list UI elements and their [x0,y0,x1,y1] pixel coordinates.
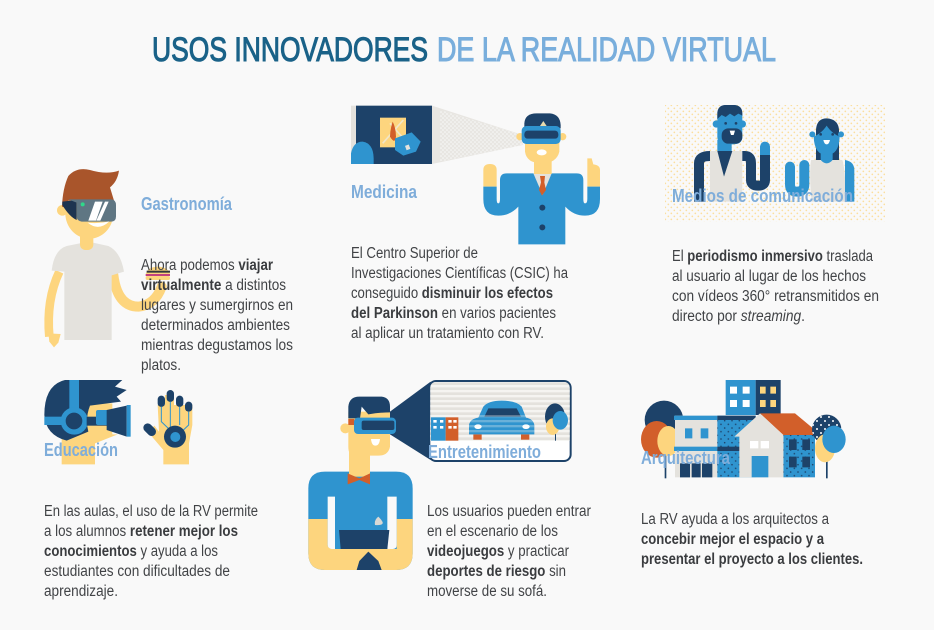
text block: medios de comunicación: El periodismo inmersivo traslada [672,248,873,265]
text block: arquitectura [641,511,863,568]
text block: gastronomía: determinados ambientes [141,317,290,334]
text block: medicina: al aplicar un tratamiento con RV. [351,325,544,342]
text block: medicina: Investigaciones Científicas (CSIC) ha [351,265,568,282]
text block: arquitectura: presentar el proyecto a los clientes. [641,551,863,568]
heading: medios de comunicación: Medios de comunicación [672,185,853,206]
text block: gastronomía: platos. [141,357,181,374]
illustration: man with VR headset eating [48,169,170,347]
panel: arquitectura [641,380,863,568]
text block: gastronomía: lugares y sumergirnos en [141,297,293,314]
text block: entretenimiento: deportes de riesgo sin [427,563,566,580]
text block: medios de comunicación: con vídeos 360° retransmitidos en [672,288,879,305]
title: USOS INNOVADORES [152,31,428,69]
text block: medicina: conseguido disminuir los efectos [351,285,553,302]
heading: gastronomía: Gastronomía [141,193,233,214]
text block: arquitectura: La RV ayuda a los arquitectos a [641,511,829,528]
text block: gastronomía: Ahora podemos viajar [141,257,273,274]
text block: educación: estudiantes con dificultades de [44,563,230,580]
panel: gastronomía [48,169,293,374]
panel: entretenimiento [308,381,591,600]
text block: gastronomía: virtualmente a distintos [141,277,286,294]
illustration: student head with VR binoculars and data glove [44,380,192,464]
heading: arquitectura: Arquitectura [641,447,731,468]
text block: medios de comunicación: al usuario al lugar de los hechos [672,268,866,285]
illustration: gamer with VR headset and projected scene [308,381,571,570]
illustration: doctor with VR headset projecting surgery [351,106,600,244]
illustration: houses, buildings and trees [641,380,846,478]
heading: educación: Educación [44,439,118,460]
panel: medios de comunicación [665,105,885,325]
heading: medicina: Medicina [351,181,418,202]
text block: educación [44,503,258,600]
title: DE LA REALIDAD VIRTUAL [437,31,776,69]
heading: entretenimiento: Entretenimiento [428,441,541,462]
text block: entretenimiento: Los usuarios pueden entrar [427,503,591,520]
text block: medios de comunicación [672,248,879,325]
text block: entretenimiento: videojuegos y practicar [427,543,569,560]
text block: medicina: El Centro Superior de [351,245,478,262]
text block: arquitectura: concebir mejor el espacio y a [641,531,824,548]
illustration: two presenters on dotted background [665,105,885,222]
text block: entretenimiento: en el escenario de los [427,523,558,540]
text block: educación: aprendizaje. [44,583,118,600]
text block: medicina [351,245,568,342]
text block: educación: conocimientos y ayuda a los [44,543,218,560]
text block: educación: En las aulas, el uso de la RV permite [44,503,258,520]
text block: entretenimiento [427,503,591,600]
text block: entretenimiento: moverse de su sofá. [427,583,547,600]
panel: educación [44,380,258,600]
panel: medicina [351,106,600,342]
text block: medios de comunicación: directo por streaming. [672,308,805,325]
text block: medicina: del Parkinson en varios pacientes [351,305,556,322]
text block: educación: a los alumnos retener mejor los [44,523,238,540]
text block: gastronomía: mientras degustamos los [141,337,293,354]
text block: gastronomía [141,257,293,374]
title [152,31,776,69]
